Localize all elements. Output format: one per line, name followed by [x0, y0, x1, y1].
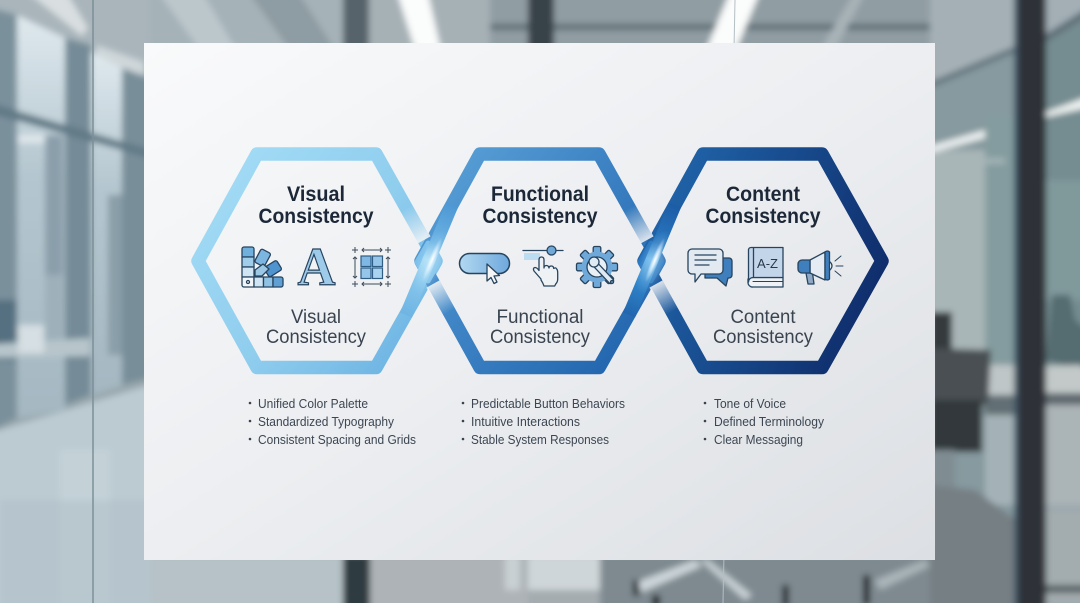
panel: white glass sign	[144, 43, 935, 560]
icon: layout grid	[352, 247, 391, 287]
heading: visual: Consistency	[258, 205, 374, 228]
crossing: right	[628, 205, 680, 316]
crossing: left	[405, 205, 457, 316]
heading: visual: Visual	[287, 183, 345, 206]
hexagon: visual	[198, 154, 436, 368]
subheading: visual: Consistency	[266, 327, 366, 348]
icon: colour swatch fan	[242, 247, 283, 287]
bullet list: visual: Standardized Typography	[258, 415, 395, 429]
hexagon: content	[644, 154, 882, 368]
bullet list: functional: Predictable Button Behaviors	[471, 397, 625, 411]
heading: functional: Functional	[491, 183, 589, 206]
column: content consistency	[688, 183, 843, 447]
icon: slider with hand	[523, 246, 563, 286]
bullet list: content: Clear Messaging	[714, 433, 803, 447]
bullet list: functional: Intuitive Interactions	[471, 415, 580, 429]
bullet list: content	[704, 397, 825, 447]
bullet list: visual: Consistent Spacing and Grids	[258, 433, 416, 447]
icon: A-Z glossary book	[748, 248, 783, 287]
subheading: content: Consistency	[713, 327, 813, 348]
bullet list: functional	[462, 397, 625, 447]
subheading: functional: Functional	[496, 307, 584, 328]
subheading: functional: Consistency	[490, 327, 590, 348]
bullet list: content: Defined Terminology	[714, 415, 825, 429]
icon: typography letter A: A	[298, 237, 336, 297]
icon: gear with wrench	[576, 246, 618, 288]
icon: megaphone	[798, 251, 843, 284]
glass door edge	[92, 0, 94, 603]
hexagon chain	[198, 154, 882, 368]
bullet list: visual	[249, 397, 416, 447]
glass door edge	[723, 0, 735, 603]
bullet list: visual: Unified Color Palette	[258, 397, 368, 411]
heading: content: Consistency	[706, 205, 821, 228]
hexagon: functional	[421, 154, 659, 368]
heading: content: Content	[726, 183, 800, 206]
icon: button with cursor	[460, 254, 510, 284]
subheading: content: Content	[730, 307, 796, 328]
icon: chat bubbles	[688, 249, 732, 286]
bullet list: functional: Stable System Responses	[471, 433, 609, 447]
icon: A-Z glossary book: A-Z	[757, 257, 778, 271]
subheading: visual: Visual	[291, 307, 341, 328]
column: functional consistency	[460, 183, 625, 447]
bullet list: content: Tone of Voice	[714, 397, 786, 411]
column: visual consistency	[242, 183, 416, 447]
heading: functional: Consistency	[482, 205, 598, 228]
